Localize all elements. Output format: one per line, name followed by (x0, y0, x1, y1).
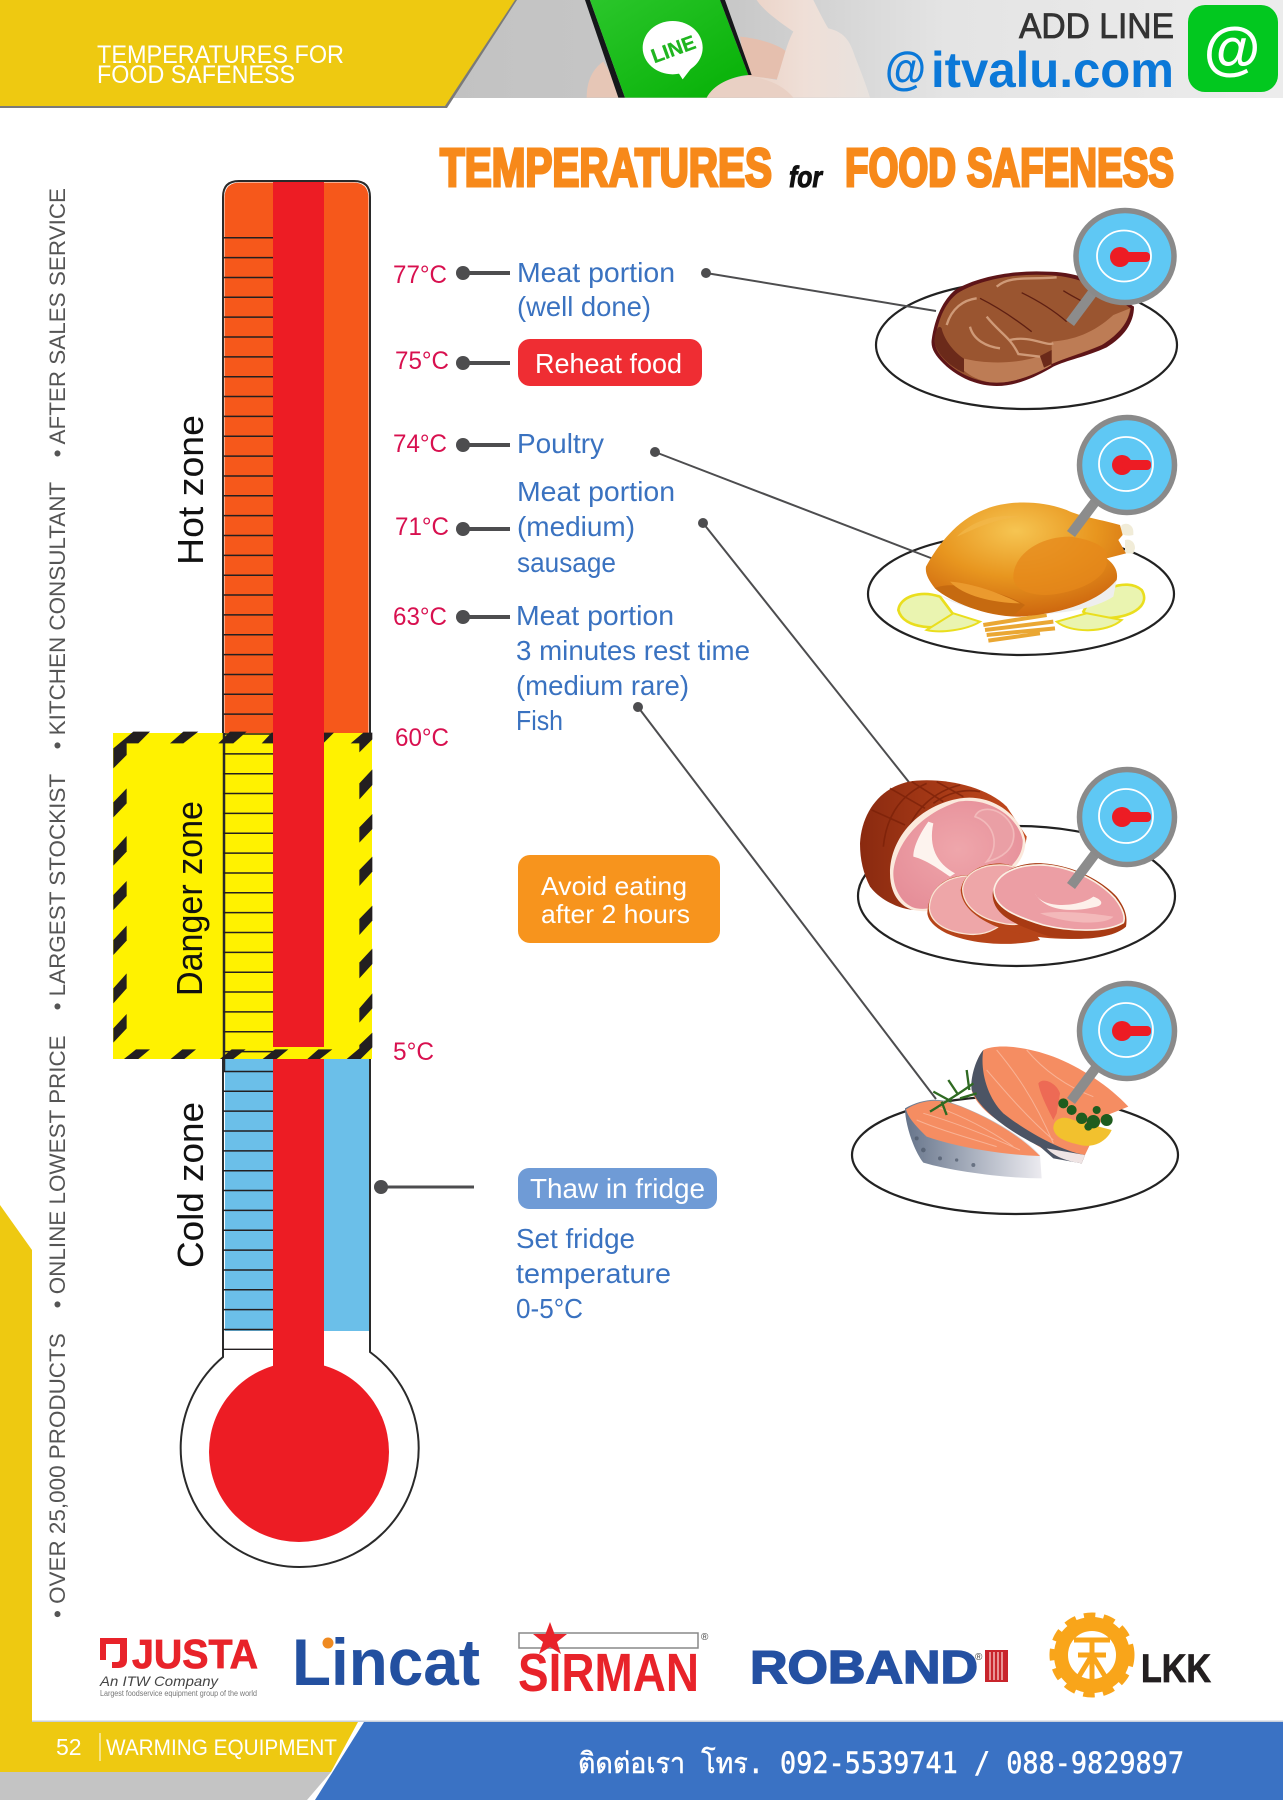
header banner (0, 0, 1283, 108)
temperature scale labels: 63°C (393, 603, 447, 631)
logo: Sirman: ® (701, 1632, 709, 1643)
brand logos (99, 1617, 1211, 1703)
temperature scale labels: 77°C (393, 261, 447, 289)
section tab (0, 0, 517, 108)
callout: avoid eating: Avoid eating (541, 871, 687, 901)
thermometer glass outline (181, 181, 419, 1567)
logo: Justa: JUSTA (132, 1631, 258, 1677)
gauge probe: steak (1070, 210, 1174, 323)
food text labels: Meat portion (517, 476, 675, 507)
danger zone panel (113, 732, 372, 1072)
cold zone label: Cold zone (170, 1102, 211, 1268)
line handle: itvalu.com (931, 42, 1174, 98)
food text labels: 3 minutes rest time (516, 635, 750, 666)
icon: LINE bubble (643, 21, 703, 79)
callout: avoid eating: after 2 hours (541, 899, 690, 929)
logo: Justa: An ITW Company (99, 1673, 219, 1689)
logo: Lincat: Lincat (292, 1625, 480, 1699)
logo: Roband: ® (975, 1652, 983, 1663)
callout: reheat food: Reheat food (535, 348, 682, 379)
sidebar vertical slogans: • OVER 25,000 PRODUCTS • ONLINE LOWEST PRICE • LARGEST STOCKIST • KITCHEN CONSULTANT • AFTER SALES SERVICE (45, 188, 70, 1618)
food text labels: (well done) (517, 291, 651, 322)
food text labels: Meat portion (516, 600, 674, 631)
add line text: ADD LINE (1019, 7, 1174, 46)
food: salmon steaks (905, 1047, 1128, 1178)
danger zone label: Danger zone (169, 801, 210, 996)
gauge probe: salmon (1071, 984, 1174, 1101)
callout: avoid eating (518, 855, 720, 943)
hot zone fill (224, 182, 368, 733)
section tab: TEMPERATURES FOR (97, 41, 344, 69)
footer (0, 1720, 1283, 1800)
connector markers (374, 266, 510, 1194)
main title: for (789, 161, 824, 194)
icon: green at-sign badge: @ (1204, 16, 1260, 81)
logo: Sirman: SIRMAN (518, 1643, 699, 1703)
logo: LKK (1054, 1617, 1211, 1693)
icon: LINE bubble: LINE (648, 32, 699, 68)
temperature scale labels: 74°C (393, 430, 447, 458)
thermometer (113, 181, 419, 1567)
food text labels (516, 257, 750, 1324)
food text labels: Meat portion (517, 257, 675, 288)
footer contact bar (315, 1722, 1283, 1800)
food: roast chicken (898, 502, 1144, 641)
section tab: FOOD SAFENESS (97, 61, 295, 89)
logo: Justa (99, 1631, 258, 1698)
temperature scale labels (393, 261, 449, 1066)
plates (852, 281, 1178, 1214)
gauge probe: ham (1071, 770, 1174, 886)
zone labels (169, 415, 211, 1268)
scale ticks (223, 237, 273, 1350)
food text labels: 0-5°C (516, 1293, 583, 1324)
food text labels: Fish (516, 705, 563, 736)
logo: LKK: LKK (1141, 1647, 1211, 1691)
main title (440, 138, 1174, 198)
footer section tab (0, 1722, 358, 1772)
left yellow strip (0, 1205, 32, 1725)
hot zone label: Hot zone (170, 415, 211, 565)
cold zone fill (225, 1059, 369, 1331)
food text labels: temperature (516, 1258, 671, 1289)
page number: 52 (56, 1734, 82, 1760)
icon: hand holding phone (585, 0, 870, 98)
temperature scale labels: 71°C (395, 513, 449, 541)
logo: Justa: Largest foodservice equipment group of the world (100, 1689, 257, 1698)
food text labels: (medium rare) (516, 670, 689, 701)
footer section name: WARMING EQUIPMENT (106, 1735, 337, 1760)
leader lines to food (633, 268, 936, 1099)
gauge probe: chicken (1071, 418, 1174, 534)
food text labels: Poultry (517, 428, 604, 459)
food: sliced ham (860, 780, 1127, 944)
mercury column (273, 182, 324, 1385)
line handle: @ (885, 42, 926, 94)
icon: green at-sign badge (1188, 5, 1278, 92)
food text labels: Set fridge (516, 1223, 635, 1254)
food text labels: (medium) (517, 511, 635, 542)
temperature scale labels: 75°C (395, 347, 449, 375)
callout: reheat food (518, 339, 702, 386)
contact phone numbers: ติดต่อเรา โทร. 092-5539741 / 088-9829897 (578, 1746, 1184, 1780)
logo: Sirman (518, 1622, 709, 1703)
logo: Roband: ROBAND (750, 1641, 978, 1693)
food: steak (932, 271, 1134, 386)
temperature scale labels: 5°C (393, 1038, 434, 1066)
main title: TEMPERATURES (440, 138, 772, 198)
food text labels: sausage (517, 547, 616, 578)
temperature scale labels: 60°C (395, 724, 449, 752)
callout: thaw in fridge (518, 1168, 717, 1209)
callout: thaw in fridge: Thaw in fridge (530, 1173, 705, 1204)
mercury bulb (209, 1362, 389, 1542)
